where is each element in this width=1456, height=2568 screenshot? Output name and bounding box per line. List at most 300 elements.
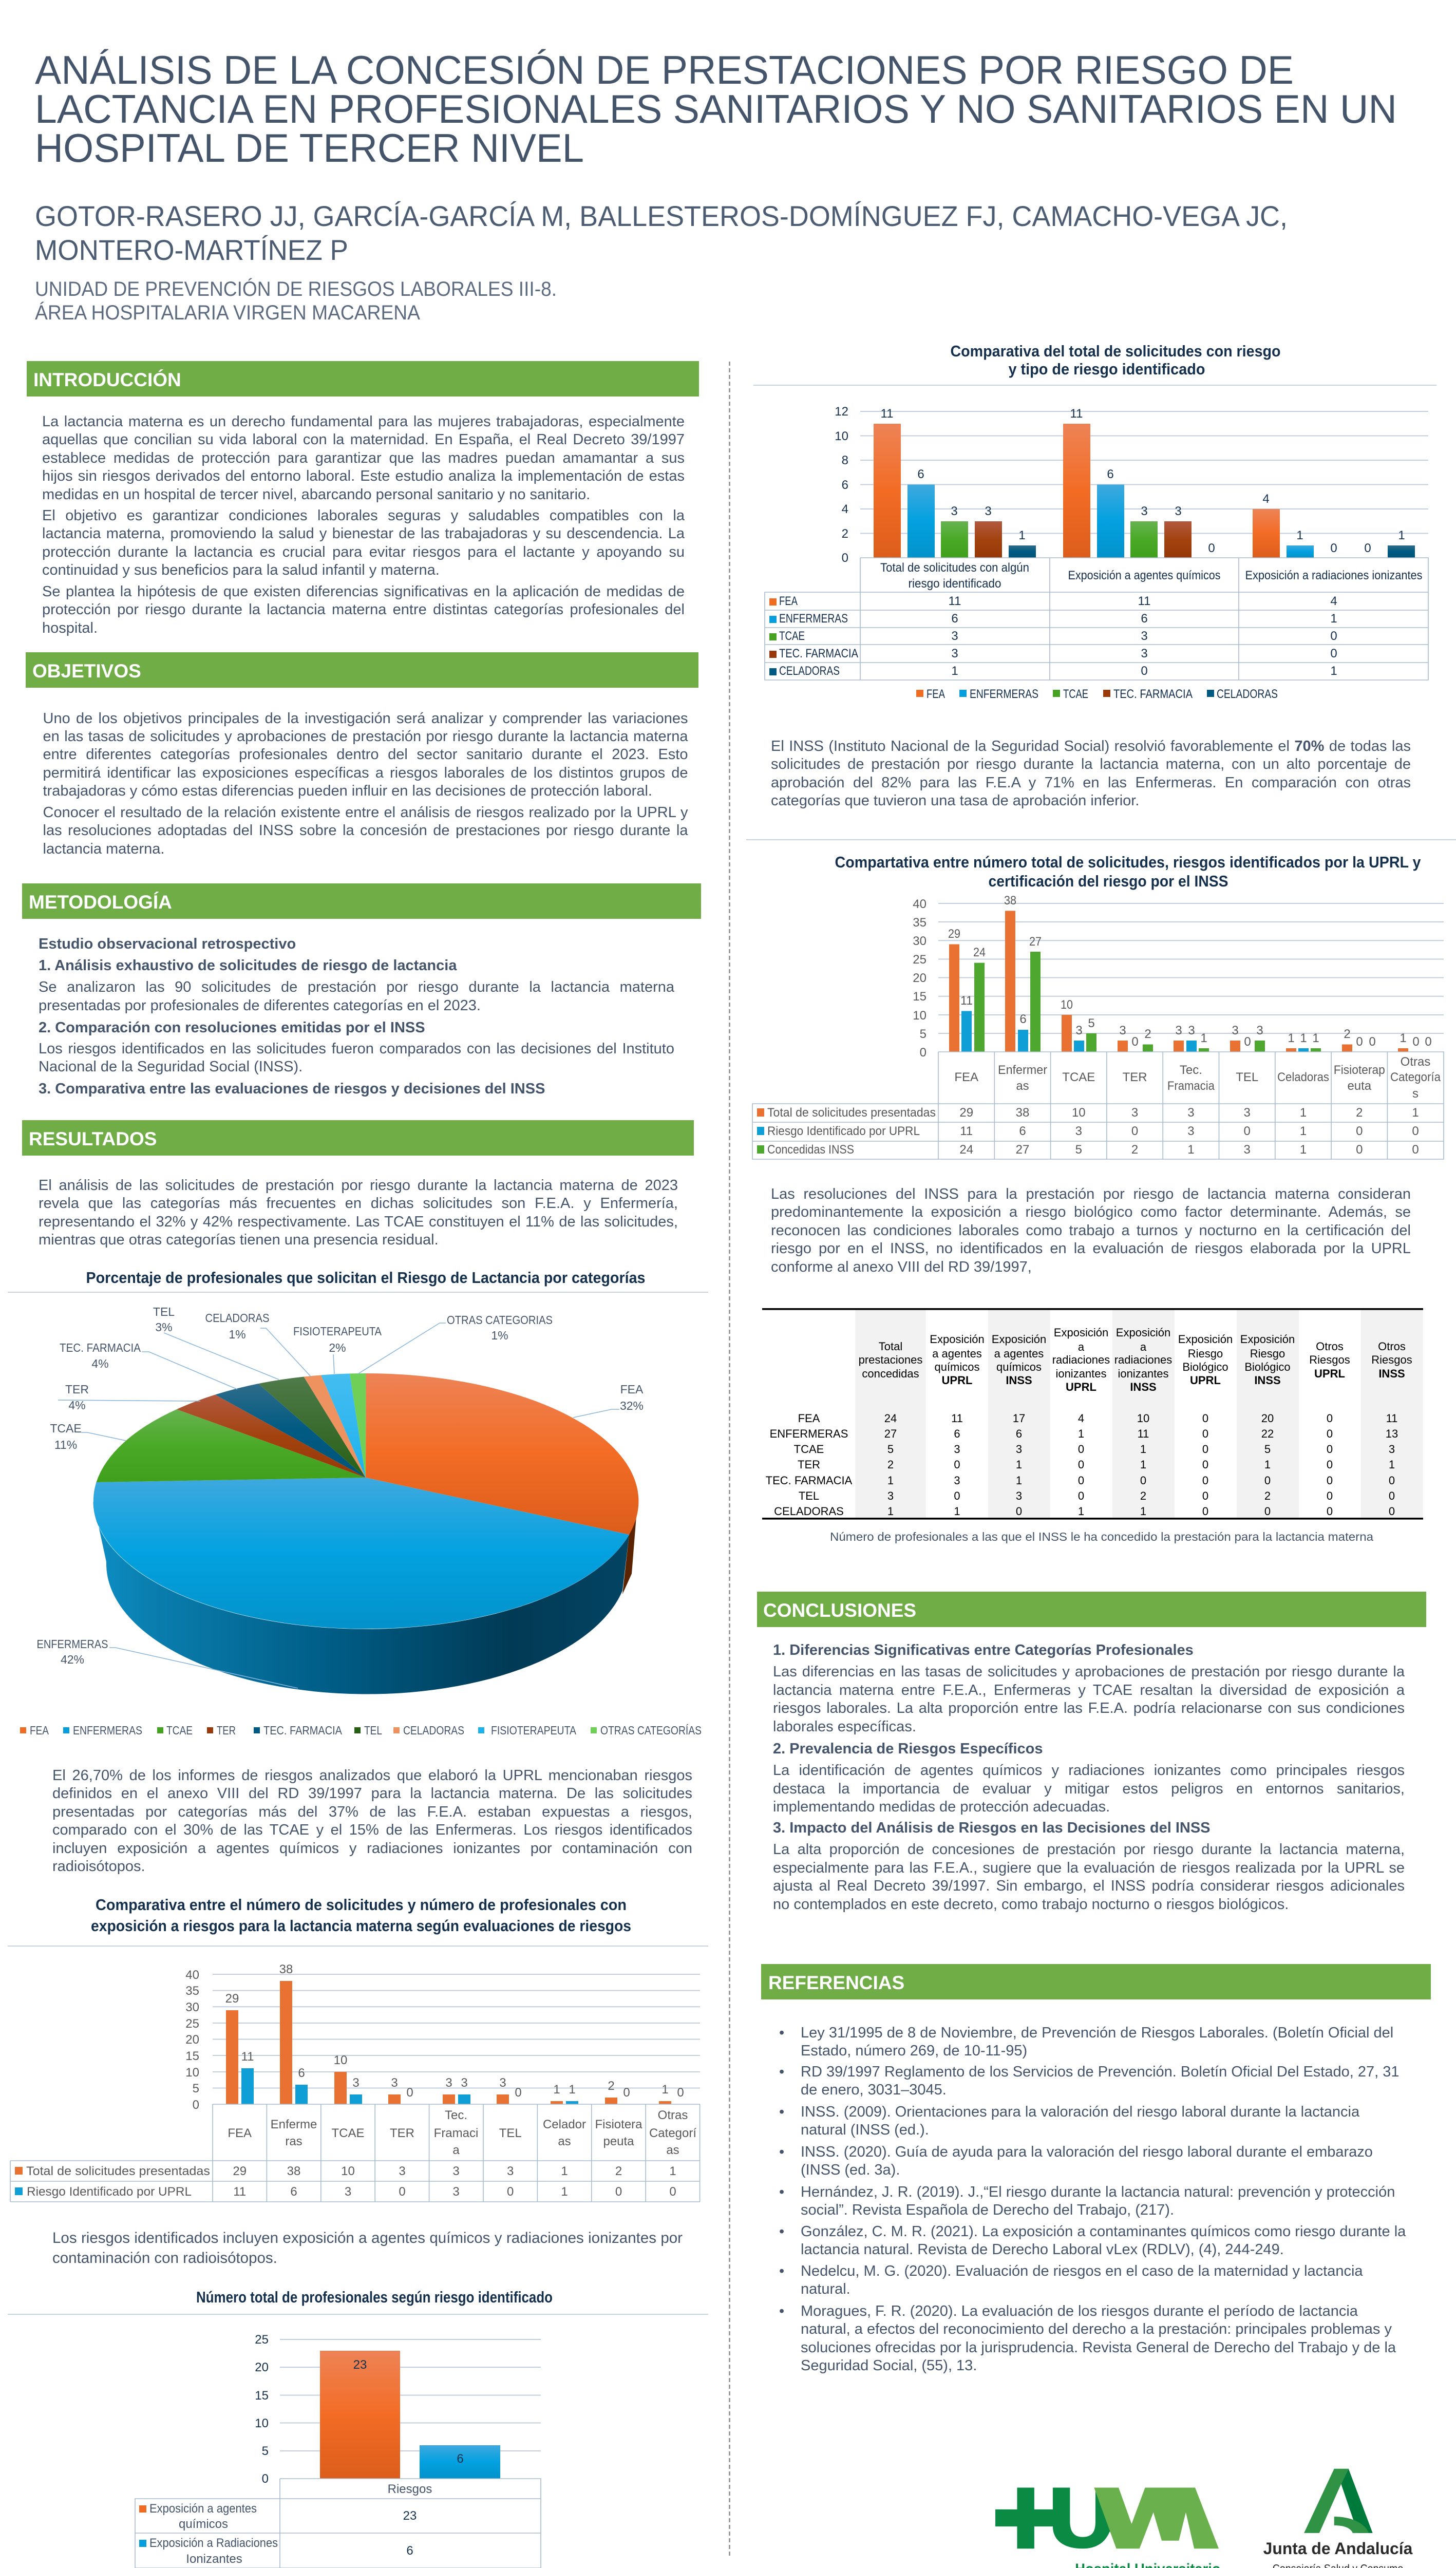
affiliation [35, 277, 557, 324]
bars: concedidas INSS [974, 952, 1321, 1052]
data table: 3 [452, 2185, 460, 2199]
text block: objetivos paragraph 1: permitirá identificar las exposiciones específicas a riesgos laborales de los distintos grupos de [43, 765, 688, 781]
data table: 0 [669, 2185, 676, 2199]
axis labels: 2 [842, 527, 848, 541]
text block: introducción paragraph 3: Se plantea la hipótesis de que existen diferencias significativas en la aplicación de medidas de [42, 583, 685, 600]
table rows: 0 [1327, 1474, 1333, 1487]
pie data labels: 4% [91, 1357, 109, 1370]
pie legend: OTRAS CATEGORÍAS [600, 1724, 702, 1737]
data table: 1 [1412, 1106, 1419, 1120]
table rows: 1 [1140, 1443, 1146, 1456]
pie data labels: 11% [54, 1438, 77, 1451]
text block: resoluciones del INSS: riesgo por en el INSS, no identificados en la evaluación de riesgos elaborada por la UPRL [771, 1240, 1411, 1257]
table rows: 11 [1138, 1427, 1149, 1440]
data table: Riesgos [388, 2482, 432, 2496]
data table: peuta [603, 2135, 634, 2148]
table column headers: radiaciones [1114, 1353, 1172, 1366]
pie legend: FISIOTERAPEUTA [491, 1724, 577, 1737]
text block: resoluciones del INSS: conforme al anexo VIII del RD 39/1997, [771, 1259, 1032, 1275]
section heading: Metodología [22, 883, 701, 919]
title: LACTANCIA EN PROFESIONALES SANITARIOS Y NO SANITARIOS EN UN [35, 86, 1397, 131]
table rows: 0 [1078, 1443, 1084, 1456]
bar data labels: 38 [1004, 894, 1016, 908]
table rows: 1 [1389, 1458, 1395, 1471]
bar data labels: 0 [1364, 541, 1371, 555]
table rows: 0 [1389, 1474, 1395, 1487]
pie legend: TEC. FARMACIA [263, 1724, 343, 1737]
bar data labels: 3 [499, 2076, 506, 2090]
bar data labels: 6 [298, 2066, 305, 2080]
data table: 3 [951, 647, 958, 660]
data table: 0 [1330, 629, 1337, 643]
data table: 6 [290, 2185, 297, 2199]
logo: Junta de Andalucía: Junta de Andalucía [1263, 2539, 1413, 2558]
text block: riesgos identificados [52, 2230, 683, 2267]
text block: informes de riesgos: incluyen exposición a agentes químicos y radiaciones ionizantes por contaminación con [52, 1840, 692, 1857]
text block: conclusión 3: no contemplados en este decreto, como trabajo nocturno o riesgos biológicos. [773, 1896, 1289, 1913]
data table: s [1412, 1087, 1419, 1101]
table rows: 1 [1016, 1474, 1022, 1487]
table rows: 0 [1140, 1474, 1146, 1487]
reference list: Seguridad Social, (55), 13. [801, 2357, 977, 2374]
table rows: 0 [1264, 1474, 1271, 1487]
reference list: Hernández, J. R. (2019). J.,“El riesgo durante la lactancia natural: prevención y protección [801, 2184, 1395, 2200]
bar data labels: 11 [881, 407, 893, 421]
table column headers: Riesgo [1250, 1347, 1285, 1360]
data table: 1 [1187, 1143, 1195, 1157]
table rows: 22 [1261, 1427, 1274, 1440]
pie data labels: 4% [68, 1399, 86, 1412]
logo: Junta de Andalucía [1263, 2469, 1413, 2568]
bar data labels: 1 [1300, 1031, 1307, 1045]
text block: resolución INSS [771, 738, 1411, 809]
text block: resultados introducción: revela que las categorías más frecuentes en dichas solicitudes son F.E.A. y Enfermería, [39, 1195, 678, 1212]
reference list: social”. Revista Española de Derecho del Trabajo, (217). [801, 2202, 1174, 2218]
axis labels: 6 [842, 478, 848, 492]
axis labels: 35 [185, 1984, 199, 1998]
data table: Exposición a agentes [149, 2502, 257, 2516]
text block: riesgos identificados: contaminación con radioisótopos. [52, 2250, 277, 2267]
text block: conclusión 3: La alta proporción de concesiones de prestación por riesgo durante la lactancia materna, [773, 1841, 1405, 1858]
bar data labels: 11 [1070, 407, 1083, 421]
table rows: 0 [1202, 1474, 1208, 1487]
table rows: 1 [1140, 1505, 1146, 1518]
table column headers: Total [879, 1340, 902, 1353]
legend: CELADORAS [1217, 687, 1278, 701]
data table: 0 [615, 2185, 622, 2199]
text block: informes de riesgos: definidos en el anexo VIII del RD 39/1997 para la lactancia materna. De las solicitudes [52, 1785, 692, 1802]
bar chart: número total de profesionales según riesgo [8, 2288, 708, 2568]
reference list: • [779, 2144, 784, 2160]
bar data labels: 3 [1119, 1024, 1126, 1037]
reference list: Ley 31/1995 de 8 de Noviembre, de Prevención de Riesgos Laborales. (Boletín Oficial del [801, 2025, 1393, 2041]
reference list: Nedelcu, M. G. (2020). Evaluación de riesgos en el caso de la maternidad y lactancia [801, 2263, 1363, 2279]
table rows [766, 1412, 1398, 1518]
text block: conclusión 3: ajusta al Real Decreto 39/1997. Sin embargo, el INSS podría considerar riesgos adicionales [773, 1878, 1405, 1894]
bar data labels: 0 [623, 2086, 630, 2100]
table rows: TEL [799, 1489, 819, 1502]
data table: 3 [951, 629, 958, 643]
section heading: Resultados [22, 1120, 694, 1156]
data table: TEL [1236, 1070, 1258, 1084]
table rows: TER [798, 1458, 820, 1471]
pie chart: porcentaje de profesionales [8, 1269, 708, 1737]
text block: resolución INSS: aprobación del 82% para las F.E.A y 71% en las Enfermeras. En comparación con otras [771, 775, 1411, 791]
data table: 3 [1187, 1124, 1195, 1138]
data table: Categorí [649, 2126, 696, 2140]
table rows: CELADORAS [774, 1505, 844, 1518]
text block: introducción paragraph 1: La lactancia materna es un derecho fundamental para las mujeres trabajadoras, especialmente [42, 413, 685, 430]
axis labels: 25 [913, 953, 926, 967]
data table: Exposición a agentes químicos [1068, 569, 1220, 582]
table rows: 0 [1078, 1489, 1084, 1502]
bar data labels: 1 [1200, 1031, 1207, 1045]
data table: Exposición a Radiaciones [149, 2536, 278, 2550]
axis labels: 40 [913, 897, 926, 911]
bar data labels: 6 [917, 467, 924, 481]
table rows: 1 [1078, 1505, 1084, 1518]
table rows: 0 [1389, 1505, 1395, 1518]
data table: TEL [499, 2126, 522, 2140]
table column headers: Otros [1316, 1340, 1344, 1353]
section heading: Objetivos: OBJETIVOS [32, 660, 141, 682]
bar data labels: 0 [1412, 1035, 1420, 1049]
bar data labels: 1 [553, 2083, 560, 2097]
table rows: 24 [884, 1412, 897, 1425]
data table: 6 [951, 612, 958, 626]
text block: método paso 2: 2. Comparación con resoluciones emitidas por el INSS [39, 1019, 425, 1035]
table column headers [859, 1326, 1412, 1393]
table rows: 0 [1202, 1443, 1208, 1456]
data table: 11 [1138, 594, 1150, 608]
text block: introducción paragraph 2: El objetivo es garantizar condiciones laborales seguras y saludables compatibles con la [42, 507, 685, 524]
text block: objetivos paragraph 1: entre diferentes categorías profesionales dentro del sector sanitario durante el 2023. Esto [43, 746, 688, 763]
table rows: 3 [1016, 1443, 1022, 1456]
table: prestaciones concedidas por riesgo [762, 1308, 1423, 1543]
bars [874, 424, 1415, 558]
data table: TCAE [779, 629, 805, 643]
data table: 11 [949, 594, 961, 608]
pie slices [93, 1373, 638, 1629]
pie legend: TEL [364, 1724, 382, 1737]
chart title: total de solicitudes con riesgo [950, 342, 1281, 378]
table rows: 3 [1016, 1489, 1022, 1502]
data table: 38 [287, 2164, 300, 2178]
chart title: número total: Número total de profesionales según riesgo identificado [196, 2288, 553, 2306]
legend: TCAE [1063, 687, 1088, 701]
section heading: Resultados: RESULTADOS [29, 1128, 157, 1149]
table column headers: Exposición [992, 1333, 1046, 1346]
bar chart: solicitudes, riesgos UPRL y certificación INSS [752, 853, 1444, 1159]
pie data labels: 2% [329, 1341, 346, 1354]
bar data labels: 3 [352, 2076, 360, 2090]
text block: introducción paragraph 2: protección durante la lactancia es crucial para evitar riesgos para el lactante y apoyando su [42, 544, 685, 560]
table rows: 2 [1264, 1489, 1271, 1502]
section heading: Metodología: METODOLOGÍA [29, 892, 172, 913]
table column headers: UPRL [942, 1374, 972, 1387]
pie data labels: 42% [61, 1653, 84, 1666]
text block: método paso 2: Nacional de la Seguridad Social (INSS). [39, 1059, 302, 1075]
data table: Total de solicitudes con algún [880, 561, 1029, 575]
data table: Celador [543, 2118, 586, 2131]
data table: 3 [1244, 1106, 1251, 1120]
table rows: 11 [1386, 1412, 1397, 1425]
data table: 1 [1300, 1143, 1307, 1157]
axis labels [185, 1968, 199, 2112]
bar data labels [881, 407, 1405, 555]
data table: 3 [1131, 1106, 1138, 1120]
table rows: 3 [954, 1443, 960, 1456]
bar data labels [948, 894, 1432, 1049]
data table: 38 [1016, 1106, 1029, 1120]
text block: conclusión 2 [773, 1741, 1405, 1815]
table column headers: Riesgos [1371, 1353, 1412, 1366]
axis labels: 15 [255, 2389, 269, 2403]
text block: resultados introducción: mientras que otras categorías tienen una presencia residual. [39, 1232, 439, 1248]
chart title: comparativa solicitudes [91, 1896, 631, 1935]
bar data labels: 0 [1244, 1035, 1251, 1049]
table rows: 2 [1140, 1489, 1146, 1502]
table rows: 0 [1202, 1505, 1208, 1518]
data table: 0 [1131, 1124, 1138, 1138]
bar data labels: 1 [1398, 528, 1405, 542]
axis labels [913, 897, 926, 1060]
table rows: 1 [1140, 1458, 1146, 1471]
data table: 3 [452, 2164, 460, 2178]
bar data labels: 11 [960, 994, 973, 1008]
table rows: 0 [1202, 1489, 1208, 1502]
table column headers: INSS [1378, 1367, 1405, 1380]
axis labels: 10 [185, 2066, 199, 2080]
table column headers: Exposición [1240, 1333, 1295, 1346]
table rows: 11 [951, 1412, 963, 1425]
axis labels [835, 405, 848, 565]
data table: 24 [959, 1143, 973, 1157]
text block: objetivos paragraph 2: lactancia materna. [43, 841, 164, 857]
axis labels: 15 [913, 990, 926, 1004]
bar data labels: 3 [445, 2076, 452, 2090]
data table: 1 [561, 2164, 568, 2178]
authors: MONTERO-MARTÍNEZ P [35, 234, 348, 266]
axis labels: 10 [255, 2416, 269, 2430]
data table [10, 2104, 700, 2202]
data table: TCAE [1062, 1070, 1095, 1084]
bar chart: total de solicitudes con riesgo y tipo de riesgo [753, 342, 1436, 701]
text block: resoluciones del INSS: predominantemente la exposición a riesgo biológico como factor determinante. Además, se [771, 1204, 1411, 1220]
data table: 0 [1412, 1143, 1419, 1157]
reference list: natural. [801, 2281, 850, 2297]
reference list [779, 2025, 1406, 2374]
data table: 6 [406, 2544, 413, 2558]
table column headers: Exposición [1178, 1333, 1233, 1346]
table rows: 1 [954, 1505, 960, 1518]
text block: conclusión 1: riesgos laborales. La alta proporción entre las F.E.A. podría relacionarse con sus condiciones [773, 1700, 1405, 1716]
table column headers: INSS [1006, 1374, 1032, 1387]
bar data labels: 1 [661, 2083, 669, 2097]
authors [35, 200, 1288, 266]
table column headers: Riesgos [1309, 1353, 1350, 1366]
text block: informes de riesgos: El 26,70% de los informes de riesgos analizados que elaboró la UPRL mencionaban riesgos [52, 1767, 692, 1784]
bar data labels: 3 [985, 504, 992, 518]
text block: método paso 1: 1. Análisis exhaustivo de solicitudes de riesgo de lactancia [39, 957, 457, 974]
data table: Framacia [1167, 1079, 1215, 1093]
table column headers: Otros [1378, 1340, 1406, 1353]
section heading: Conclusiones [757, 1592, 1426, 1627]
text block: conclusión 1 [773, 1642, 1405, 1735]
axis labels: 5 [193, 2082, 199, 2095]
table rows: 1 [887, 1474, 894, 1487]
data table: Enferme [271, 2118, 317, 2131]
bar data labels: 0 [1369, 1035, 1376, 1049]
text block: introducción paragraph 1: aquellas que concilian su vida laboral con la maternidad. En España, el Real Decreto 39/1997 [42, 431, 685, 448]
data table: 27 [1016, 1143, 1029, 1157]
data table: Total de solicitudes presentadas [767, 1106, 936, 1120]
text block: objetivos paragraph 2: Conocer el resultado de la relación existente entre el análisis de riesgos realizado por la UPRL y [43, 804, 688, 821]
table rows: 1 [1016, 1458, 1022, 1471]
text block: conclusión 2: La identificación de agentes químicos y radiaciones ionizantes como principales riesgos [773, 1762, 1405, 1779]
reference list: • [779, 2223, 784, 2240]
data table: 10 [341, 2164, 355, 2178]
table rows: 0 [1202, 1458, 1208, 1471]
bar data labels: 29 [225, 1992, 239, 2006]
text block: resultados introducción: representando el 32% y 42% respectivamente. Las TCAE constituyen el 11% de las solicitudes, [39, 1214, 678, 1230]
text block: introducción paragraph 1 [42, 413, 685, 503]
bar data labels: 3 [1075, 1024, 1083, 1037]
bars: riesgo identificado UPRL [961, 1011, 1309, 1052]
text block: tipo de estudio: Estudio observacional retrospectivo [39, 936, 296, 952]
table column headers: a [1078, 1340, 1085, 1353]
text block: objetivos paragraph 1: en las tasas de solicitudes y aprobaciones de prestación por riesgo durante la lactancia materna [43, 728, 688, 745]
reference list: INSS. (2020). Guía de ayuda para la valoración del riesgo laboral durante el embarazo [801, 2144, 1373, 2160]
text block: introducción paragraph 1: establece medidas de protección para garantizar que las madres puedan amamantar a sus [42, 450, 685, 466]
bar data labels: 0 [515, 2086, 522, 2100]
reference list: • [779, 2184, 784, 2200]
bar data labels: 0 [1425, 1035, 1432, 1049]
text block: introducción paragraph 2: lactancia materna, promoviendo la salud y bienestar de las trabajadoras y su descendencia. La [42, 525, 685, 542]
chart title: comparativa solicitudes: Comparativa entre el número de solicitudes y número de profesionales con [96, 1896, 627, 1914]
text block: resolución INSS: El INSS (Instituto Nacional de la Seguridad Social) resolvió favorablemente el 70% de todas las [771, 738, 1411, 754]
data table: 3 [1141, 629, 1148, 643]
text block: objetivos paragraph 2 [43, 804, 688, 857]
text block: método paso 1: Se analizaron las 90 solicitudes de prestación por riesgo durante la lactancia materna [39, 979, 674, 995]
reference list: • [779, 2263, 784, 2279]
text block: conclusión 2: destaca la importancia de evaluar y mitigar estos peligros en entornos sanitarios, [773, 1781, 1405, 1797]
bar data labels: 1 [1400, 1031, 1407, 1045]
bar chart: solicitudes y profesionales con exposición [8, 1896, 708, 2202]
data table: 2 [1356, 1106, 1363, 1120]
section heading: Conclusiones: CONCLUSIONES [763, 1600, 916, 1621]
text block: introducción paragraph 1: medidas en un hospital de tercer nivel, abarcando personal sanitario y no sanitario. [42, 486, 590, 503]
data table: 1 [1330, 612, 1337, 626]
data table: 0 [1141, 664, 1148, 678]
legend [916, 687, 1278, 701]
axis labels: 25 [185, 2017, 199, 2031]
text block: introducción paragraph 3: hospital. [42, 620, 98, 636]
data table: 0 [1330, 647, 1337, 660]
section heading: Referencias: REFERENCIAS [768, 1972, 904, 1993]
bar data labels: 11 [241, 2050, 254, 2064]
reference list: Estado, número 269, de 10-11-95) [801, 2043, 1027, 2059]
text block: resolución INSS: categorías que tuvieron una tasa de aprobación inferior. [771, 792, 1139, 809]
axis labels: 5 [920, 1027, 926, 1041]
reference list: INSS. (2009). Orientaciones para la valoración del riesgo laboral durante la lactancia [801, 2104, 1359, 2120]
pie data labels: ENFERMERAS [37, 1637, 108, 1651]
table rows: 0 [1389, 1489, 1395, 1502]
table rows: 6 [1016, 1427, 1022, 1440]
table rows: 3 [1389, 1443, 1395, 1456]
reference list: • [779, 2025, 784, 2041]
data table: Otras [658, 2108, 688, 2122]
pie leader lines [58, 1323, 619, 1688]
reference list: González, C. M. R. (2021). La exposición a contaminantes químicos como riesgo durante la [801, 2223, 1406, 2240]
pie data labels: TER [65, 1383, 89, 1396]
table column headers: ionizantes [1055, 1367, 1107, 1380]
pie data labels: TCAE [50, 1422, 82, 1435]
table rows: 0 [1078, 1458, 1084, 1471]
pie data labels: TEC. FARMACIA [60, 1341, 141, 1354]
pie data labels: 32% [620, 1399, 644, 1412]
axis labels: 0 [193, 2098, 199, 2112]
text block: objetivos paragraph 1: Uno de los objetivos principales de la investigación será analizar y comprender las variaciones [43, 710, 688, 726]
table rows: TCAE [794, 1443, 824, 1456]
table column headers: Biológico [1182, 1361, 1228, 1373]
table rows: 0 [1327, 1412, 1333, 1425]
text block: riesgos identificados: Los riesgos identificados incluyen exposición a agentes químicos y radiaciones ionizantes por [52, 2230, 683, 2246]
text block: informes de riesgos: radioisótopos. [52, 1858, 145, 1875]
pie legend: TER [217, 1724, 236, 1737]
bars: total solicitudes [949, 911, 1408, 1052]
data table: TCAE [331, 2126, 365, 2140]
pie data labels [37, 1305, 644, 1666]
text block: método paso 1: presentadas por profesionales de diferentes categorías en el 2023. [39, 997, 481, 1014]
bars: riesgo identificado UPRL [241, 2068, 578, 2104]
axis labels: 12 [835, 405, 848, 419]
text block: conclusión 3 [773, 1820, 1405, 1913]
text block: resoluciones del INSS: reconocen las condiciones laborales como trabajo a turnos y nocturno en la certificación del [771, 1222, 1411, 1239]
bar data labels: 1 [1018, 528, 1026, 542]
table rows: 13 [1386, 1427, 1398, 1440]
data table: 1 [1300, 1106, 1307, 1120]
text block: resolución INSS: solicitudes de prestación por riesgo durante la lactancia materna, con un alto porcentaje de [771, 756, 1411, 772]
pie legend: CELADORAS [403, 1724, 464, 1737]
table column headers: INSS [1254, 1374, 1281, 1387]
bar data labels: 6 [1019, 1012, 1027, 1026]
data table: 3 [1244, 1143, 1251, 1157]
bar data labels [225, 1962, 684, 2100]
bar data labels: 4 [1262, 492, 1270, 506]
data table: 29 [233, 2164, 247, 2178]
axis labels: 35 [913, 916, 926, 930]
reference list: • [779, 2064, 784, 2080]
bar data labels: 0 [1356, 1035, 1363, 1049]
chart title: porcentaje de profesionales: Porcentaje de profesionales que solicitan el Riesgo de Lactancia por categorías [86, 1269, 645, 1287]
table rows: 0 [1327, 1458, 1333, 1471]
data table: 5 [1075, 1143, 1082, 1157]
pie data labels: 1% [229, 1328, 246, 1341]
reference list: natural (INSS (ed.). [801, 2122, 929, 2138]
data table: as [1016, 1079, 1029, 1093]
table column headers: radiaciones [1052, 1353, 1110, 1366]
pie data labels: 3% [155, 1320, 173, 1334]
bars [320, 2351, 500, 2479]
text block: conclusión 1: lactancia materna entre F.E.A., Enfermeras y TCAE resaltan la diversidad de exposición a [773, 1682, 1405, 1698]
data table: 3 [345, 2185, 351, 2199]
data table: FEA [228, 2126, 252, 2140]
axis labels: 10 [835, 429, 848, 443]
table rows: 27 [884, 1427, 897, 1440]
table rows: 17 [1013, 1412, 1025, 1425]
title [35, 47, 1397, 171]
